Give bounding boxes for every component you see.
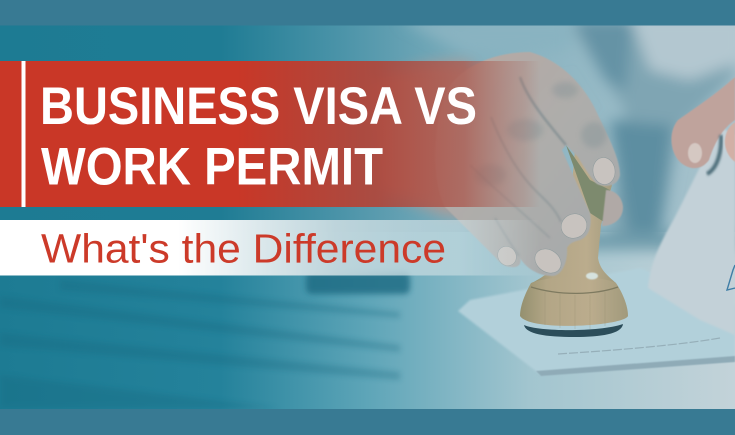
arm fading under red band: [370, 62, 500, 215]
subtitle: What's the Difference: [41, 226, 446, 272]
second hand at right: [671, 77, 735, 174]
finger creases: [470, 77, 566, 256]
title panel: red band: [0, 61, 540, 207]
shadow on table: [306, 272, 410, 294]
title: [40, 77, 477, 196]
subtitle panel: white band: [0, 220, 540, 276]
knuckle shading: [474, 82, 607, 186]
hand holding stamp: [370, 52, 623, 278]
bottom band: [0, 409, 735, 435]
icon: wooden stamp: [520, 145, 628, 337]
hand silhouette: [435, 52, 620, 276]
far fingertip: [602, 190, 623, 226]
raised paper page: [648, 127, 735, 335]
blurred shirt: [400, 15, 735, 250]
title: BUSINESS VISA VS: [40, 77, 477, 136]
title: WORK PERMIT: [41, 138, 383, 196]
top band: [0, 0, 735, 26]
fingernails: [494, 156, 617, 278]
passport document: [458, 268, 735, 376]
table streaks: [0, 280, 400, 408]
